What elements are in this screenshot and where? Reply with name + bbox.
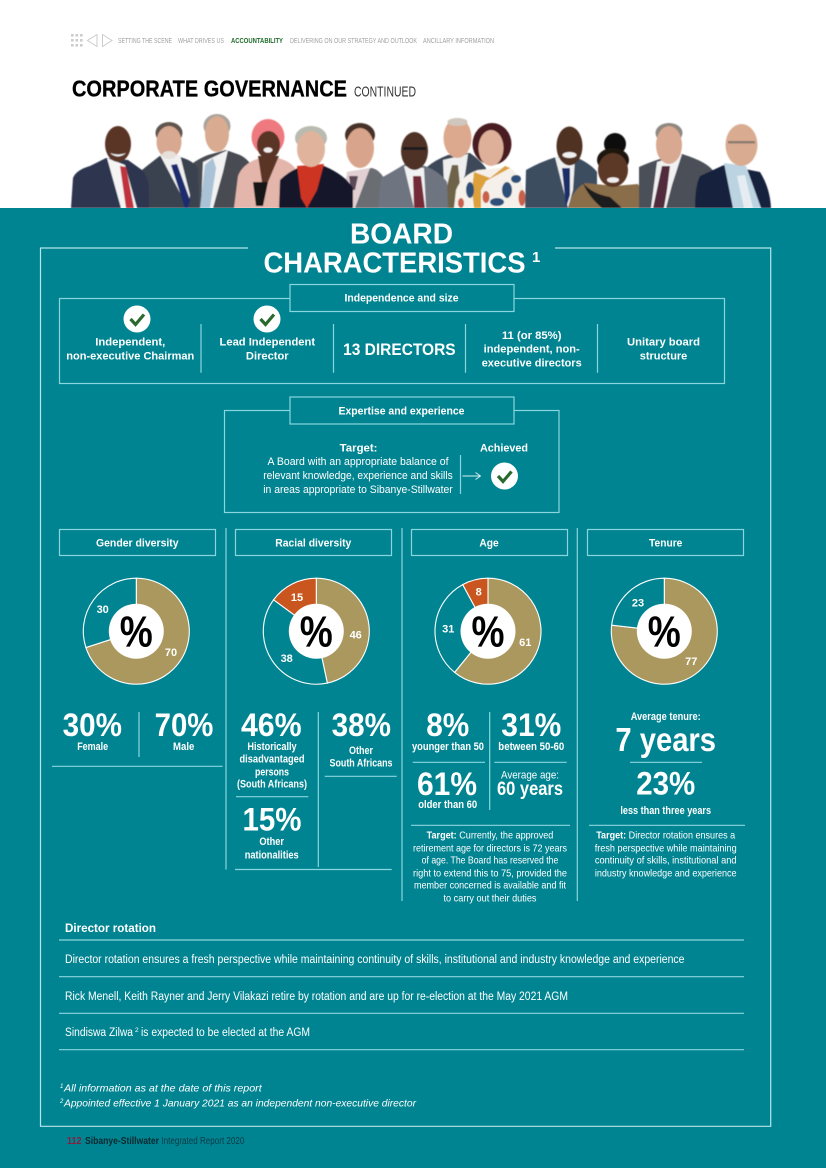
stat: less than three years <box>620 765 711 817</box>
stat: less than three years: 23% <box>636 765 695 801</box>
text: target: A Board with an appropriate balance of <box>268 456 449 468</box>
page footer: Sibanye-Stillwater <box>85 1136 159 1147</box>
stat: less than three years: less than three years <box>620 805 711 817</box>
text: chairman <box>66 337 195 362</box>
stat: female: Female <box>77 741 108 753</box>
donut chart: tenure <box>611 578 717 684</box>
heading: age <box>412 530 568 556</box>
text: target <box>263 443 453 496</box>
footnotes: Appointed effective 1 January 2021 as an independent non-executive director <box>63 1098 416 1110</box>
text: tenure target: fresh perspective while maintaining <box>595 842 737 854</box>
page title: CORPORATE GOVERNANCE <box>72 76 347 102</box>
text: age target: Target: Currently, the approved <box>427 830 553 842</box>
navigation bar: SETTING THE SCENE <box>118 36 172 45</box>
donut chart: racial: % <box>300 608 333 657</box>
donut chart: tenure: 23 <box>632 598 644 610</box>
heading: gender diversity <box>60 530 216 556</box>
heading: tenure <box>588 530 744 556</box>
text: age target: of age. The Board has reserved the <box>422 855 558 867</box>
text: unitary board: Unitary board <box>627 337 700 349</box>
stat: average age: 60 years <box>497 779 563 800</box>
portrait: director 11 <box>568 133 645 208</box>
stat: average age: Average age: <box>501 770 559 782</box>
stat: other south africans <box>330 707 392 770</box>
heading: tenure: Tenure <box>649 538 682 550</box>
text: target: relevant knowledge, experience and skills <box>263 470 453 482</box>
text: rotation line 3: is expected to be elected at the AGM <box>141 1027 310 1039</box>
text: independent directors: independent, non- <box>484 344 580 356</box>
panel: expertise and experience <box>224 397 559 512</box>
navigation bar: DELIVERING ON OUR STRATEGY AND OUTLOOK <box>290 36 417 45</box>
stat: historically disadvantaged: 46% <box>241 707 302 743</box>
icon: previous arrow <box>88 34 97 46</box>
heading: age: Age <box>479 538 499 550</box>
stat: historically disadvantaged: (South Africans) <box>237 779 307 791</box>
stat: other south africans: 38% <box>332 707 391 743</box>
stat: younger than 50: younger than 50 <box>412 741 484 753</box>
donut chart: tenure: % <box>648 608 681 657</box>
page footer <box>67 1136 245 1147</box>
donut chart: age: 8 <box>476 587 482 599</box>
board member portraits <box>71 114 771 208</box>
column dividers <box>226 528 577 901</box>
icon: check chairman <box>124 306 150 332</box>
portrait: director 9 <box>454 123 528 208</box>
stat: female: 30% <box>63 707 122 743</box>
text: tenure target <box>595 830 737 879</box>
icon: next arrow <box>102 34 112 46</box>
donut chart: tenure: 77 <box>685 656 697 668</box>
navigation bar: ANCILLARY INFORMATION <box>423 36 494 45</box>
text: rotation line 3: 2 <box>135 1027 139 1034</box>
donut chart: racial: 46 <box>350 630 362 642</box>
text: lead independent director <box>220 337 315 362</box>
panel: racial diversity <box>235 530 397 870</box>
heading: gender diversity: Gender diversity <box>96 538 179 550</box>
heading: racial diversity: Racial diversity <box>275 538 352 550</box>
stat: older than 60: 61% <box>417 766 477 802</box>
donut chart: age: 31 <box>442 624 454 636</box>
navigation bar: WHAT DRIVES US <box>178 36 224 45</box>
panel: tenure <box>588 530 745 879</box>
portrait: director 8 <box>427 118 486 208</box>
icon: grid menu <box>71 34 83 47</box>
text: tenure target: industry knowledge and experience <box>595 867 737 879</box>
stat: other nationalities <box>242 802 302 862</box>
stat: between 50-60: between 50-60 <box>498 741 564 753</box>
stat: between 50-60: 31% <box>501 707 561 743</box>
text: unitary board: structure <box>640 350 687 362</box>
heading: racial diversity <box>236 530 392 556</box>
text: tenure target: Target: Director rotation ensures a <box>596 830 735 842</box>
text: target: Target: <box>340 443 378 455</box>
stat: average tenure: 7 years <box>615 721 716 758</box>
panel: gender diversity <box>52 530 223 766</box>
stat: older than 60: older than 60 <box>418 799 477 811</box>
stat: average tenure: Average tenure: <box>631 711 701 723</box>
text: tenure target: continuity of skills, institutional and <box>595 855 737 867</box>
heading: board characteristics <box>264 218 540 280</box>
text: unitary board <box>627 337 700 362</box>
text: age target: retirement age for directors is 72 years <box>413 842 567 854</box>
donut chart: racial: 38 <box>281 653 293 665</box>
portrait: director 5 <box>279 126 353 208</box>
donut chart: age <box>435 578 541 684</box>
stat: other south africans: South Africans <box>330 758 392 770</box>
stat: other south africans: Other <box>349 745 374 757</box>
heading: board characteristics: CHARACTERISTICS <box>264 248 526 280</box>
panel: age <box>411 530 570 904</box>
heading: director rotation: Director rotation <box>65 921 156 935</box>
portrait: director 10 <box>525 126 597 208</box>
panel: expertise and experience: Expertise and experience <box>338 405 464 417</box>
stat: other nationalities: nationalities <box>245 850 299 862</box>
text: age target: right to extend this to 75, provided the <box>413 867 567 879</box>
panel: independence and size <box>60 284 724 384</box>
text: independent directors <box>482 330 582 370</box>
heading: board characteristics: BOARD <box>350 218 453 250</box>
stat: other nationalities: Other <box>259 836 285 848</box>
donut chart: racial <box>263 578 369 684</box>
portrait: director 6 <box>345 123 392 208</box>
text: rotation line 3 <box>65 1027 310 1039</box>
stat: other nationalities: 15% <box>242 802 302 838</box>
page footer: Integrated Report 2020 <box>161 1136 245 1147</box>
footnotes: All information as at the date of this report <box>63 1083 263 1095</box>
stat: average age <box>497 770 563 800</box>
text: rotation line 1: Director rotation ensures a fresh perspective while maintaining continuity of skills, institutional and industry knowledge and experience <box>65 954 684 966</box>
text: age target: to carry out their duties <box>444 892 536 904</box>
donut chart: gender: 30 <box>97 604 109 616</box>
stat: historically disadvantaged: Historically <box>247 741 297 753</box>
navigation bar <box>71 34 494 47</box>
stat: historically disadvantaged: persons <box>255 766 289 778</box>
stat: younger than 50: 8% <box>426 707 469 743</box>
icon: arrow <box>462 472 480 480</box>
text: achieved: Achieved <box>480 443 528 455</box>
portrait: director 13 <box>695 124 771 208</box>
text: age target: member concerned is available and fit <box>414 880 566 892</box>
footnotes: 1 <box>60 1084 63 1090</box>
text: 13 directors: 13 DIRECTORS <box>343 340 456 359</box>
page footer: 112 <box>67 1136 82 1147</box>
stat: historically disadvantaged: disadvantaged <box>240 754 304 766</box>
stat: younger than 50 <box>412 707 484 753</box>
navigation bar: ACCOUNTABILITY <box>231 36 283 45</box>
text: rotation line 2: Rick Menell, Keith Rayner and Jerry Vilakazi retire by rotation and are up for re-election at the May 2021 AGM <box>65 991 568 1003</box>
text: lead independent director: Director <box>246 350 289 362</box>
portrait: director 2 <box>142 122 199 208</box>
donut chart: racial: 15 <box>291 592 303 604</box>
stat: male: Male <box>173 741 194 753</box>
icon: check lead director <box>254 306 280 332</box>
donut chart: age: 61 <box>519 637 531 649</box>
text: independent directors: 11 (or 85%) <box>502 330 562 342</box>
text: chairman: Independent, <box>95 337 165 349</box>
portrait: director 3 <box>193 114 253 208</box>
icon: check achieved <box>491 462 518 490</box>
donut chart: gender: % <box>120 608 153 657</box>
text: chairman: non-executive Chairman <box>66 350 195 362</box>
donut chart: gender <box>83 578 189 684</box>
footnotes <box>59 1083 416 1110</box>
text: independent directors: executive directors <box>482 358 582 370</box>
portrait: director 12 <box>639 123 714 208</box>
portrait: director 1 <box>71 126 149 208</box>
portrait: director 7 <box>378 132 448 208</box>
donut chart: age: % <box>472 608 504 657</box>
page title: CONTINUED <box>354 84 416 100</box>
text: target: in areas appropriate to Sibanye-Stillwater <box>263 484 453 496</box>
panel: director rotation <box>59 921 744 1050</box>
stat: historically disadvantaged <box>237 707 307 791</box>
text: lead independent director: Lead Independent <box>220 337 315 349</box>
text: rotation line 3: Sindiswa Zilwa <box>65 1027 134 1039</box>
text: age target <box>413 830 567 904</box>
stat: male: 70% <box>155 707 213 743</box>
donut chart: gender: 70 <box>165 647 177 659</box>
panel: independence and size: Independence and size <box>344 293 458 305</box>
outer frame <box>40 248 771 1126</box>
footnotes: 2 <box>59 1099 64 1105</box>
portrait: director 4 <box>234 119 299 208</box>
heading: board characteristics: 1 <box>532 249 540 266</box>
